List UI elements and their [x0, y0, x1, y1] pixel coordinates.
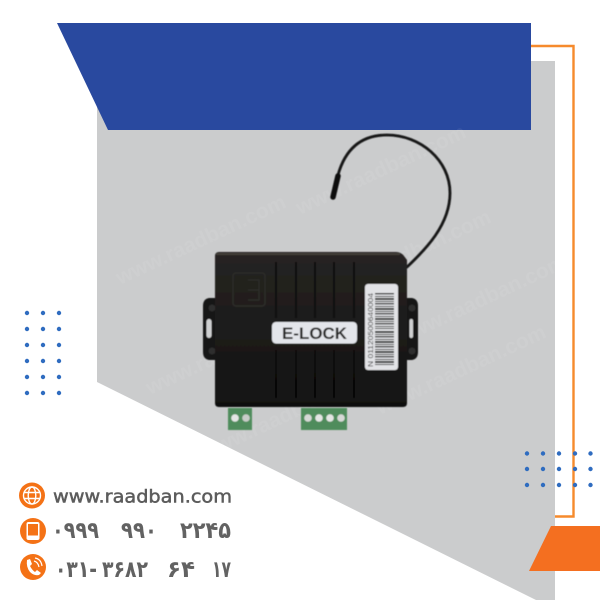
website text: www.raadban.com — [53, 486, 232, 508]
terminal block: right — [301, 408, 347, 430]
watermark text: www.raadban.com — [111, 191, 290, 290]
landline number — [55, 557, 231, 583]
mobile number: ۰۹۹۹ — [52, 518, 99, 544]
icon: telephone — [20, 554, 46, 580]
mobile number — [52, 518, 231, 544]
watermark text: www.raadban.com — [291, 121, 470, 220]
E-LOCK label — [272, 322, 357, 344]
watermark text — [111, 121, 570, 465]
panel: orange parallelogram — [529, 526, 600, 571]
housing — [215, 252, 407, 407]
logo embossed — [233, 273, 265, 306]
barcode bars — [375, 293, 394, 365]
panel: blue banner — [57, 23, 531, 130]
mobile number: ۹۹۰ — [121, 518, 157, 544]
barcode label: N 01120500640004 — [366, 293, 375, 367]
watermark text: www.raadban.com — [141, 301, 320, 400]
panel: orange outline frame — [531, 46, 574, 516]
panel: gray backdrop — [97, 61, 555, 600]
watermark text: www.raadban.com — [316, 206, 495, 305]
dot grid: left — [25, 311, 61, 395]
watermark text: www.raadban.com — [391, 251, 570, 350]
mounting ear: left — [203, 298, 216, 360]
landline number: ۳۶۸۲ — [102, 557, 148, 583]
device: E-LOCK module — [203, 135, 450, 430]
mounting ear: right — [407, 298, 418, 360]
E-LOCK label: E-LOCK — [282, 325, 347, 343]
mobile number: ۲۲۴۵ — [180, 518, 231, 544]
landline number: ۱۷ — [212, 557, 231, 583]
terminal block: left — [228, 408, 252, 430]
icon: globe — [19, 482, 45, 508]
barcode label — [365, 284, 398, 370]
watermark text: www.raadban.com — [196, 366, 375, 465]
watermark text: www.raadban.com — [371, 321, 550, 420]
icon: mobile phone — [20, 518, 46, 544]
landline number: ۶۴ — [167, 557, 195, 583]
housing rim — [216, 253, 400, 255]
panel: white cut left of the blue banner — [40, 23, 97, 300]
antenna wire — [333, 135, 450, 267]
dot grid: right — [525, 451, 593, 487]
housing ribs — [276, 262, 354, 398]
landline number: ۰۳۱- — [55, 557, 97, 583]
